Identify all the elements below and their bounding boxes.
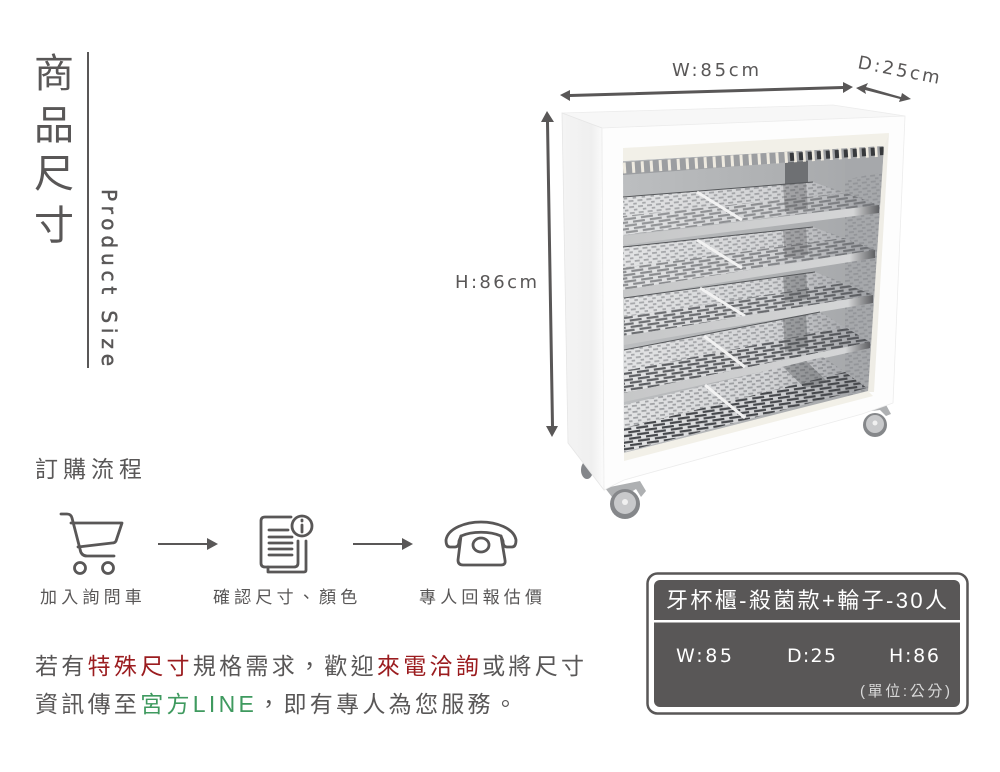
arrow: step 2 to 3 (353, 538, 413, 550)
cabinet side panel (562, 113, 604, 490)
subtitle: Product Size: Product Size (97, 189, 121, 366)
spec table (648, 574, 968, 714)
heading: order process: 訂購流程 (35, 456, 147, 482)
value: height: H:86 (889, 645, 939, 667)
step label: confirm size and color: 確認尺寸、顏色 (213, 588, 361, 607)
table title: 牙杯櫃-殺菌款+輪子-30人 (666, 588, 947, 613)
cabinet top face (562, 105, 905, 128)
mirrored right wall (845, 146, 884, 396)
step label: specialist replies with quote: 專人回報估價 (419, 588, 546, 607)
roller shutter band (623, 133, 889, 161)
table outer border (648, 574, 968, 714)
front-left caster (605, 481, 646, 519)
back-left caster (581, 461, 593, 479)
comb rack (623, 151, 884, 168)
comb rack base (623, 146, 884, 175)
right caster (863, 403, 891, 437)
step label: add to inquiry cart: 加入詢問車 (40, 588, 146, 607)
title divider line (87, 52, 89, 368)
table inner panel (654, 580, 960, 707)
title: 商品尺寸: 商 (34, 52, 74, 96)
note text: 資訊傳至宮方LINE，即有專人為您服務。 (35, 691, 520, 717)
label W:85cm: W:85cm (672, 60, 759, 81)
width arrow (560, 82, 853, 101)
dark comb section (790, 151, 884, 157)
icon: document with info (261, 516, 312, 572)
shelf 3 (624, 272, 873, 345)
shelf 2 (623, 227, 875, 298)
cabinet front frame (602, 116, 905, 490)
height arrow (541, 111, 558, 437)
arrow: step 1 to 2 (158, 538, 218, 550)
window interior (623, 146, 884, 453)
note text (35, 653, 587, 717)
unit note: (單位:公分) (860, 683, 950, 700)
label D:25cm: D:25cm (856, 52, 942, 89)
title: 商品尺寸 (34, 52, 74, 248)
shelf 1 (623, 182, 879, 245)
reflection column (785, 156, 808, 200)
title: 商品尺寸: 尺 (34, 152, 74, 196)
product photo: sterilizing cup cabinet (562, 105, 905, 519)
title: 商品尺寸: 寸 (34, 204, 74, 248)
value: depth: D:25 (787, 645, 836, 667)
mirrored right wall perforations (845, 172, 882, 396)
label H:86cm: H:86cm (455, 272, 537, 293)
icon: telephone (446, 522, 516, 565)
title: 商品尺寸: 品 (34, 104, 74, 148)
note text: 若有特殊尺寸規格需求，歡迎來電洽詢或將尺寸 (35, 653, 587, 679)
bottom shelf (624, 357, 867, 452)
window right edge (868, 133, 889, 392)
icon: shopping cart (61, 514, 122, 574)
bottom cream strip (624, 391, 873, 461)
table divider (654, 620, 960, 622)
depth arrow (856, 83, 911, 102)
value: width: W:85 (676, 645, 732, 667)
shelf 4 (624, 312, 870, 402)
